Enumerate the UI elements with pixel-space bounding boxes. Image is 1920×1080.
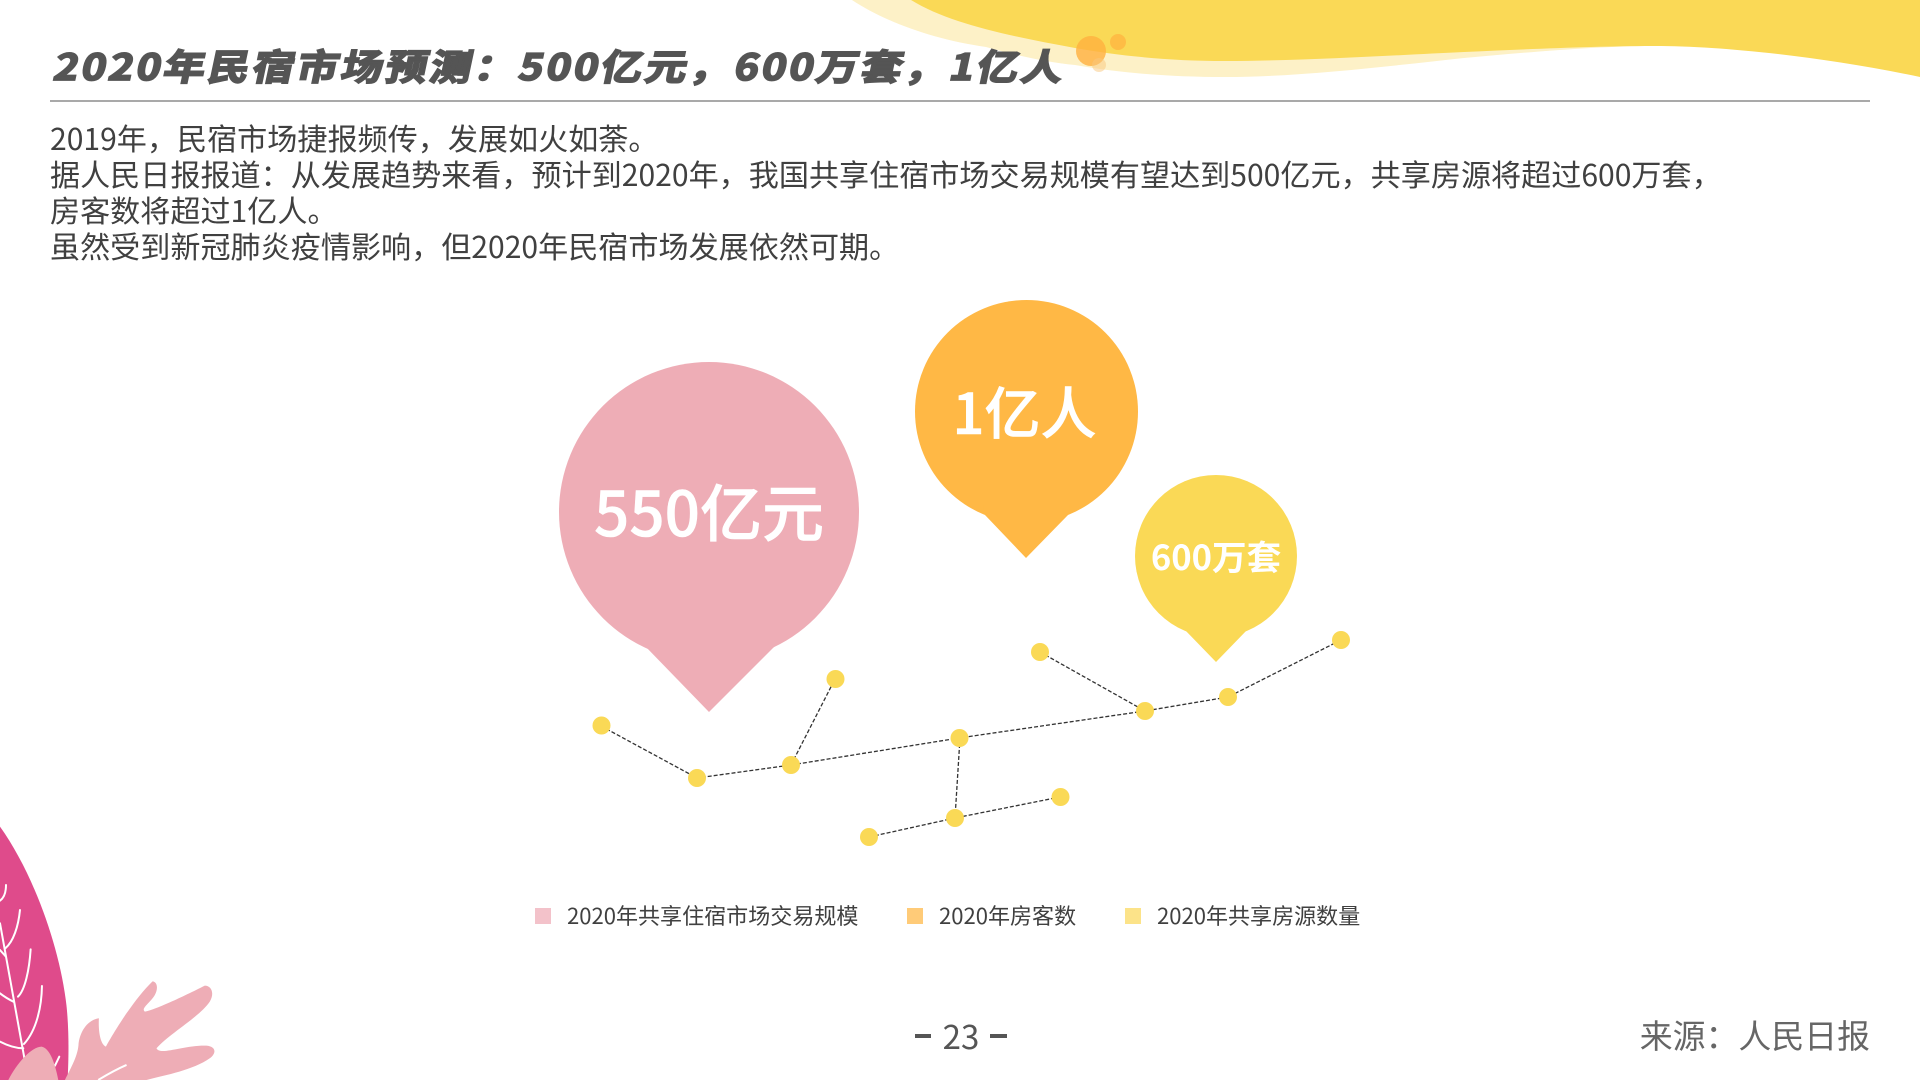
header divider line — [50, 100, 1870, 102]
legend swatch: guests — [907, 908, 923, 924]
legend — [535, 899, 1360, 931]
legend label: guests: 2020年房客数 — [939, 899, 1076, 931]
page number: 23 — [943, 1011, 979, 1059]
legend swatch: listings — [1125, 908, 1141, 924]
intro text block: 房客数将超过1亿人。 — [50, 186, 338, 230]
bubble: listings — [1135, 475, 1297, 662]
legend label: listings: 2020年共享房源数量 — [1157, 899, 1360, 931]
intro text block — [50, 114, 1722, 266]
page number dashes — [915, 1034, 1007, 1038]
bubble: guests — [915, 300, 1138, 558]
top yellow wave decoration — [852, 0, 1920, 77]
intro text block: 2019年，民宿市场捷报频传，发展如火如荼。 — [50, 114, 658, 158]
bubble label: 1亿人: 1亿人 — [953, 370, 1096, 450]
source note: 来源：人民日报 — [1640, 1011, 1870, 1058]
bottom-left leaves decoration — [0, 827, 214, 1080]
bubble label: 600万套: 600万套 — [1151, 530, 1281, 580]
legend swatch: market size — [535, 908, 551, 924]
constellation network — [592, 631, 1350, 846]
title: 2020年民宿市场预测：500亿元，600万套，1亿人 — [50, 39, 1073, 91]
intro text block: 虽然受到新冠肺炎疫情影响，但2020年民宿市场发展依然可期。 — [50, 222, 899, 266]
bubble label: 550亿元: 550亿元 — [594, 464, 824, 554]
bubble: market size — [559, 362, 859, 712]
legend label: market size: 2020年共享住宿市场交易规模 — [567, 899, 858, 931]
intro text block: 据人民日报报道：从发展趋势来看，预计到2020年，我国共享住宿市场交易规模有望达到500亿元，共享房源将超过600万套， — [50, 150, 1722, 194]
